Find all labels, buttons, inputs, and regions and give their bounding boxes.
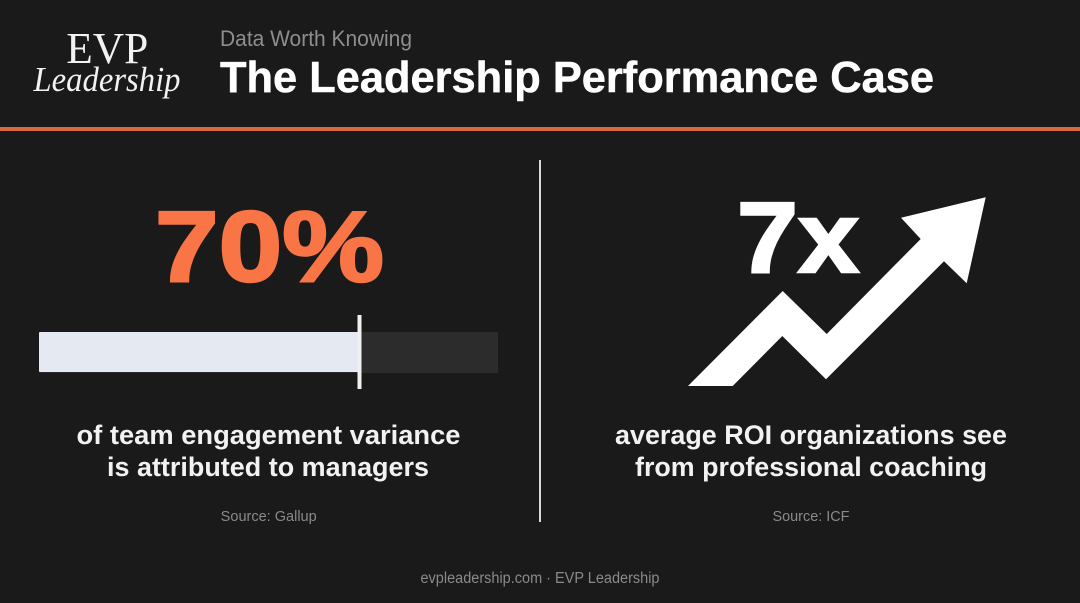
header title: The Leadership Performance Case — [220, 53, 934, 102]
icon: rising arrow — [688, 197, 986, 386]
source: ICF: Source: ICF — [772, 509, 850, 525]
big stat: 7x: 7x — [737, 182, 859, 294]
footer: evpleadership.com · EVP Leadership — [420, 570, 660, 587]
description: of team engagement variance — [76, 420, 461, 450]
logo: EVP Leadership: EVP — [66, 24, 148, 73]
big stat: 70%: 70% — [155, 191, 384, 303]
logo: EVP Leadership — [33, 24, 180, 99]
panel: coaching ROI statistic — [615, 182, 1007, 525]
description: is attributed to managers — [107, 452, 429, 482]
panel: manager engagement statistic — [39, 191, 498, 525]
header subtitle: Data Worth Knowing — [220, 26, 412, 51]
description — [76, 420, 461, 482]
description: average ROI organizations see — [615, 420, 1007, 450]
description — [615, 420, 1007, 482]
logo: EVP Leadership: Leadership — [33, 60, 180, 99]
vertical divider — [539, 160, 541, 522]
description: from professional coaching — [635, 452, 987, 482]
progress bar — [39, 315, 498, 389]
orange header rule — [0, 127, 1080, 131]
source: Gallup: Source: Gallup — [221, 509, 317, 525]
